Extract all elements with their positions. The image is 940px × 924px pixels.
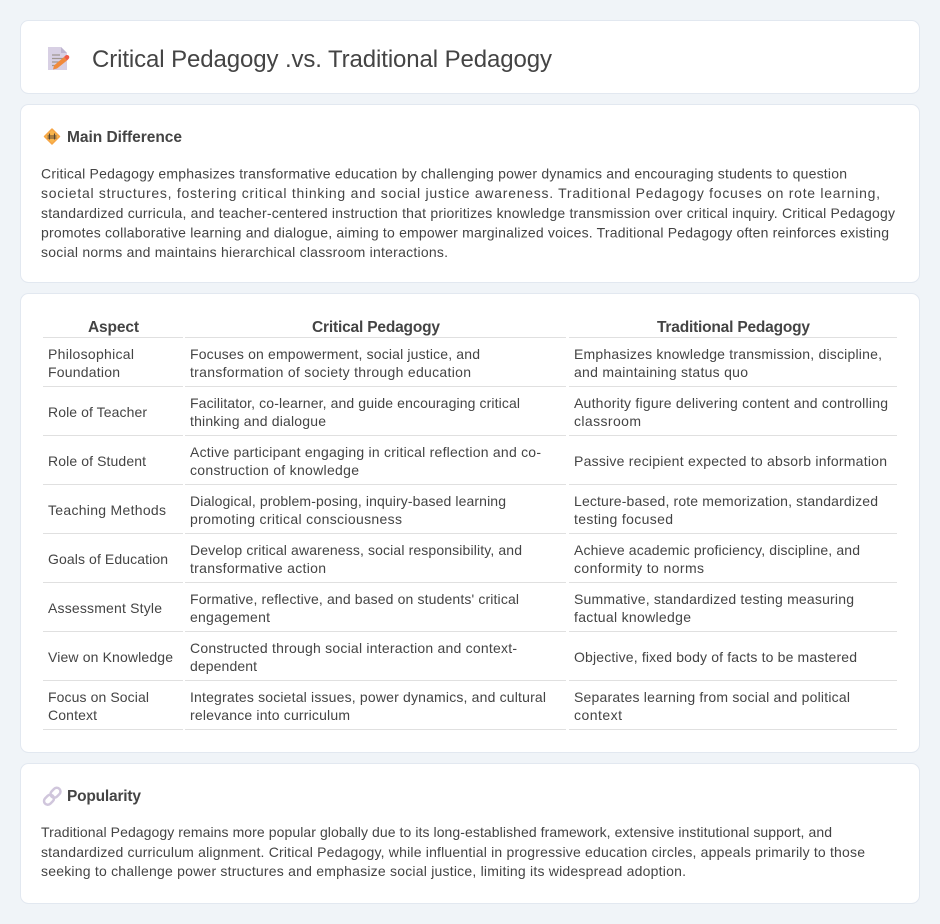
table header row: Critical Pedagogy (312, 319, 440, 336)
table row: philosophical foundation: Foundation (48, 364, 120, 380)
table row: assessment style: factual knowledge (574, 609, 691, 625)
text block: main difference: social norms and maintains hierarchical classroom interactions. (41, 244, 448, 260)
text block: popularity: Traditional Pedagogy remains more popular globally due to its long-established framework, extensive institutional support, and (41, 824, 832, 840)
table row: role of student: Active participant engaging in critical reflection and co- (190, 444, 541, 460)
table row: assessment style (48, 591, 854, 625)
table row: role of student: Passive recipient expected to absorb information (574, 453, 887, 469)
table row: teaching methods: Dialogical, problem-posing, inquiry-based learning (190, 493, 506, 509)
table row: view on knowledge: View on Knowledge (48, 649, 173, 665)
text block: main difference: promotes collaborative learning and dialogue, aiming to empower marginalized voices. Traditional Pedagogy often reinforces existing (41, 224, 889, 240)
text block: main difference: societal structures, fostering critical thinking and social justice awareness. Traditional Pedagogy focuses on rote learning, (41, 185, 880, 201)
heading: main difference: Main Difference (67, 129, 182, 146)
table row: focus on social context: Focus on Social (48, 689, 149, 705)
table row: assessment style: Assessment Style (48, 600, 162, 616)
table row: goals of education (48, 542, 860, 576)
table row: focus on social context (48, 689, 850, 723)
table row: focus on social context: Separates learning from social and political (574, 689, 850, 705)
table row: goals of education: Develop critical awareness, social responsibility, and (190, 542, 522, 558)
text block: popularity: standardized curriculum alignment. Critical Pedagogy, while influential in progressive education circles, appeals primarily to those (41, 844, 865, 860)
table row: role of teacher: thinking and dialogue (190, 413, 326, 429)
table row: teaching methods (48, 493, 878, 527)
panel: title card (20, 20, 920, 94)
icon: orange diamond sign (44, 129, 60, 144)
table row: view on knowledge (48, 640, 857, 674)
panel: popularity (20, 764, 920, 904)
icon: chain link (42, 786, 62, 806)
heading: popularity: Popularity (67, 788, 141, 805)
table row: role of teacher (48, 395, 888, 429)
table row: focus on social context: Integrates societal issues, power dynamics, and cultural (190, 689, 546, 705)
text block: main difference (41, 166, 895, 260)
table row: teaching methods: promoting critical consciousness (190, 511, 402, 527)
table row: teaching methods: testing focused (574, 511, 673, 527)
table row: role of teacher: Role of Teacher (48, 404, 147, 420)
table row: focus on social context: context (574, 707, 622, 723)
table row: philosophical foundation: Emphasizes knowledge transmission, discipline, (574, 346, 882, 362)
table row: assessment style: Summative, standardized testing measuring (574, 591, 854, 607)
table row: philosophical foundation (48, 346, 882, 380)
table row: focus on social context: Context (48, 707, 97, 723)
table row: role of student: construction of knowledge (190, 462, 359, 478)
table row: view on knowledge: dependent (190, 658, 257, 674)
panel: comparison table (20, 294, 920, 752)
text block: main difference: standardized curricula, and teacher-centered instruction that prioritizes knowledge transmission over critical inquiry. Critical Pedagogy (41, 205, 895, 221)
table row: view on knowledge: Constructed through social interaction and context- (190, 640, 517, 656)
table row: teaching methods: Teaching Methods (48, 502, 166, 518)
table row: goals of education: Goals of Education (48, 551, 168, 567)
table row: role of teacher: Facilitator, co-learner, and guide encouraging critical (190, 395, 520, 411)
table header row: Traditional Pedagogy (657, 319, 810, 336)
table header row (88, 319, 810, 336)
table row: philosophical foundation: and maintaining status quo (574, 364, 748, 380)
table row: philosophical foundation: Philosophical (48, 346, 134, 362)
table row: role of student: Role of Student (48, 453, 146, 469)
text block: main difference: Critical Pedagogy emphasizes transformative education by challenging power dynamics and encouraging students to question (41, 166, 847, 182)
text block: popularity (41, 824, 865, 879)
table header row: Aspect (88, 319, 139, 336)
title: Critical Pedagogy .vs. Traditional Pedagogy (92, 46, 552, 73)
table row: goals of education: conformity to norms (574, 560, 704, 576)
panel: main difference (20, 104, 920, 282)
table row: view on knowledge: Objective, fixed body of facts to be mastered (574, 649, 857, 665)
table row: role of student (48, 444, 887, 478)
table row: assessment style: engagement (190, 609, 270, 625)
table row: philosophical foundation: transformation of society through education (190, 364, 471, 380)
table row: philosophical foundation: Focuses on empowerment, social justice, and (190, 346, 480, 362)
table row: focus on social context: relevance into curriculum (190, 707, 350, 723)
text block: popularity: seeking to challenge power structures and emphasize social justice, limiting its widespread adoption. (41, 863, 686, 879)
table row: teaching methods: Lecture-based, rote memorization, standardized (574, 493, 878, 509)
table row: assessment style: Formative, reflective, and based on students' critical (190, 591, 519, 607)
table row: role of teacher: Authority figure delivering content and controlling (574, 395, 888, 411)
table row: goals of education: transformative action (190, 560, 326, 576)
table row: role of teacher: classroom (574, 413, 641, 429)
table row: goals of education: Achieve academic proficiency, discipline, and (574, 542, 860, 558)
icon: document with pencil (48, 47, 69, 70)
